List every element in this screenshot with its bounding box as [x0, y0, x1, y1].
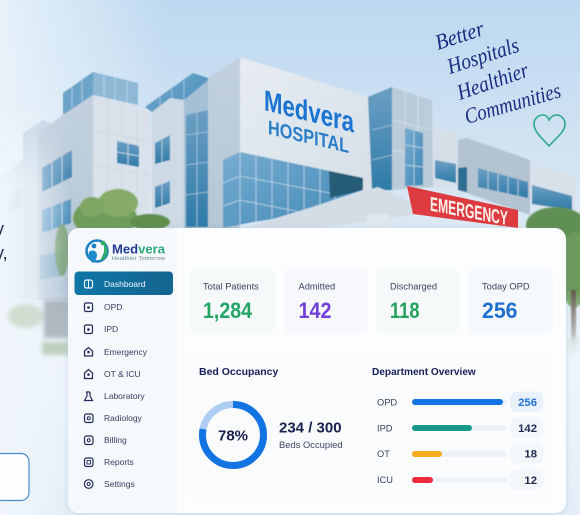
hospital name sign: HOSPITAL — [268, 117, 349, 158]
stat card: admitted: Admitted — [298, 282, 335, 292]
panel: department overview — [361, 353, 553, 501]
nav item: laboratory: Laboratory — [104, 391, 145, 401]
hospital name sign: Medvera — [264, 84, 354, 140]
logo: Medvera — [112, 242, 166, 256]
stat card: today OPD — [468, 269, 553, 333]
stat card: today OPD: Today OPD — [482, 282, 530, 292]
lower ground fade — [0, 290, 580, 515]
tagline handwriting — [432, 15, 564, 129]
tree near building left — [55, 189, 170, 276]
stat card: total patients — [189, 269, 276, 333]
nav item: laboratory — [84, 391, 145, 401]
nav item: radiology: Radiology — [104, 413, 143, 423]
heading: department overview: Department Overview — [372, 367, 476, 378]
logo — [86, 240, 166, 263]
panel: bed occupancy — [189, 353, 358, 501]
nav item: billing — [84, 435, 127, 445]
stat card: total patients: Total Patients — [203, 282, 259, 292]
nav item: emergency: Emergency — [104, 347, 148, 357]
nav item: dashboard active: Dashboard — [104, 279, 146, 289]
nav item: OPD — [84, 302, 122, 312]
nav item: emergency — [84, 347, 148, 357]
tagline handwriting: Healthier — [453, 57, 532, 105]
nav item: radiology — [84, 413, 143, 423]
nav item: settings: Settings — [104, 479, 135, 489]
row: OPD — [377, 392, 543, 412]
stat card: discharged: Discharged — [390, 282, 437, 292]
hospital name sign — [264, 84, 354, 158]
stat card: admitted — [284, 269, 368, 333]
bed count — [279, 420, 343, 450]
right tower — [368, 87, 433, 190]
stat card: total patients: 1,284 — [203, 298, 253, 323]
bed count: 234 / 300 — [279, 420, 342, 436]
bed count: Beds Occupied — [279, 439, 343, 450]
stat card: today OPD: 256 — [482, 298, 518, 323]
main block — [208, 57, 372, 240]
sidebar background — [68, 228, 177, 513]
tree right — [526, 207, 580, 358]
row: OT: 18 — [524, 448, 537, 460]
logo: Healthier Tomorrow — [112, 256, 166, 262]
row: OT — [377, 443, 543, 464]
emergency sign: EMERGENCY — [430, 194, 508, 230]
nav item: OPD: OPD — [104, 302, 122, 312]
left block — [38, 72, 150, 300]
nav item: IPD — [84, 324, 118, 334]
nav item: dashboard active — [74, 272, 173, 295]
stat card: discharged: 118 — [390, 298, 420, 323]
tagline handwriting: Hospitals — [443, 32, 522, 79]
icon: medvera logo — [86, 240, 108, 263]
donut chart: 78 percent — [202, 404, 264, 466]
right low wing — [433, 127, 577, 215]
lower left faded tree and entrance — [8, 300, 70, 355]
stat card: admitted: 142 — [298, 298, 332, 323]
row: ICU — [377, 470, 543, 490]
sidebar navigation — [74, 272, 173, 489]
row: OPD: 256 — [518, 397, 537, 409]
panel: dashboard — [68, 228, 566, 513]
nav item: IPD: IPD — [104, 324, 118, 334]
donut chart: 78 percent: 78% — [218, 428, 248, 444]
row: OT: OT — [377, 449, 390, 459]
heading: bed occupancy: Bed Occupancy — [199, 366, 279, 378]
nav item: reports — [84, 457, 134, 467]
row: ICU: 12 — [524, 475, 537, 487]
nav item: billing: Billing — [104, 435, 127, 445]
stat card: discharged — [376, 269, 460, 333]
row: ICU: ICU — [377, 475, 393, 485]
clipped left button — [0, 454, 29, 500]
left white fade — [0, 128, 67, 515]
nav item: OT and ICU: OT & ICU — [104, 369, 141, 379]
far left faded wing — [0, 120, 55, 300]
tagline handwriting: Better — [432, 15, 487, 55]
row: IPD — [377, 418, 543, 438]
emergency sign — [407, 186, 518, 230]
hospital building — [0, 57, 577, 300]
entrance canopy — [240, 187, 413, 230]
row: IPD: 142 — [518, 423, 537, 435]
row: OPD: OPD — [377, 398, 397, 408]
tagline handwriting: Communities — [461, 77, 564, 129]
nav item: settings — [84, 479, 135, 489]
icon: heart — [534, 115, 565, 146]
clipped left text fragment — [0, 219, 8, 263]
nav item: reports: Reports — [104, 457, 134, 467]
nav item: OT and ICU — [84, 369, 141, 379]
row: IPD: IPD — [377, 424, 393, 434]
middle block with glass tower — [145, 73, 208, 240]
